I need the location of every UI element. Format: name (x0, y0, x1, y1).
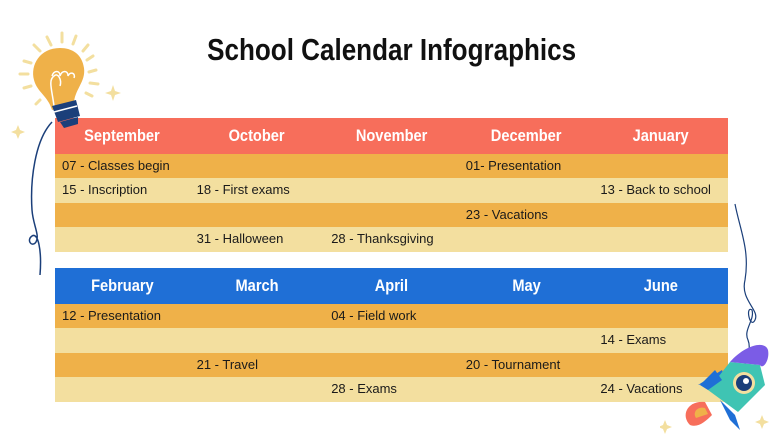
row 2: 15 - Inscription (62, 182, 147, 197)
row 3 (55, 203, 728, 227)
row 4 (55, 227, 728, 252)
title: School Calendar Infographics (207, 32, 576, 67)
row 4: 28 - Exams (331, 381, 397, 396)
header row red: December (491, 126, 561, 145)
header row blue (55, 268, 728, 304)
row 4: 31 - Halloween (197, 231, 283, 246)
row 1 (55, 304, 728, 328)
row 3: 23 - Vacations (466, 207, 548, 222)
header row blue: May (512, 276, 540, 295)
row 1: 04 - Field work (331, 308, 416, 323)
header row red (55, 118, 728, 154)
row 3 (55, 353, 728, 377)
header row red: November (356, 126, 427, 145)
header row blue: March (235, 276, 278, 295)
panel: table feb-jun (55, 268, 728, 402)
header row red: September (85, 126, 160, 145)
header row red: January (633, 126, 689, 145)
row 4 (55, 377, 728, 402)
row 2: 14 - Exams (600, 332, 666, 347)
row 3: 21 - Travel (197, 357, 258, 372)
row 3: 20 - Tournament (466, 357, 560, 372)
row 2 (55, 328, 728, 353)
row 1: 01- Presentation (466, 158, 561, 173)
row 4: 24 - Vacations (600, 381, 683, 396)
row 1: 07 - Classes begin (62, 158, 170, 173)
header row blue: April (375, 276, 408, 295)
row 4: 28 - Thanksgiving (331, 231, 434, 246)
header row blue: June (644, 276, 678, 295)
row 1: 12 - Presentation (62, 308, 161, 323)
header row red: October (229, 126, 285, 145)
row 2: 13 - Back to school (600, 182, 711, 197)
panel: table sep-jan (55, 118, 728, 252)
row 2: 18 - First exams (197, 182, 290, 197)
row 1 (55, 154, 728, 178)
row 2 (55, 178, 728, 203)
icon: rocket (660, 204, 769, 434)
header row blue: February (91, 276, 154, 295)
icon: light bulb (11, 32, 121, 275)
